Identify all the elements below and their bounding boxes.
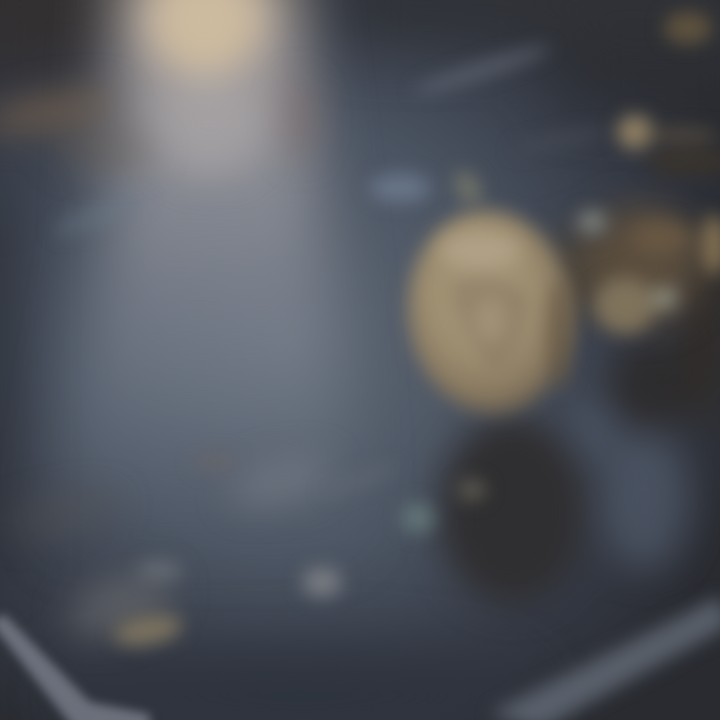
bottom left diagonal light edge	[0, 614, 150, 720]
bottom right diagonal light edge	[490, 596, 720, 720]
top right gold highlights	[617, 12, 720, 174]
beam of light	[40, 0, 365, 570]
scattered small coins on the surface	[0, 452, 333, 648]
warm glow at the top of the beam	[150, 0, 265, 175]
background coins to the right of the main coin	[546, 207, 702, 323]
dark reflection under the coin	[438, 220, 720, 604]
main gold coin	[398, 202, 582, 422]
light streaks upper right	[50, 41, 610, 241]
stem highlight above the coin	[449, 167, 487, 209]
warm streaks left of the beam	[0, 80, 314, 166]
coin engraved detail	[440, 232, 572, 390]
